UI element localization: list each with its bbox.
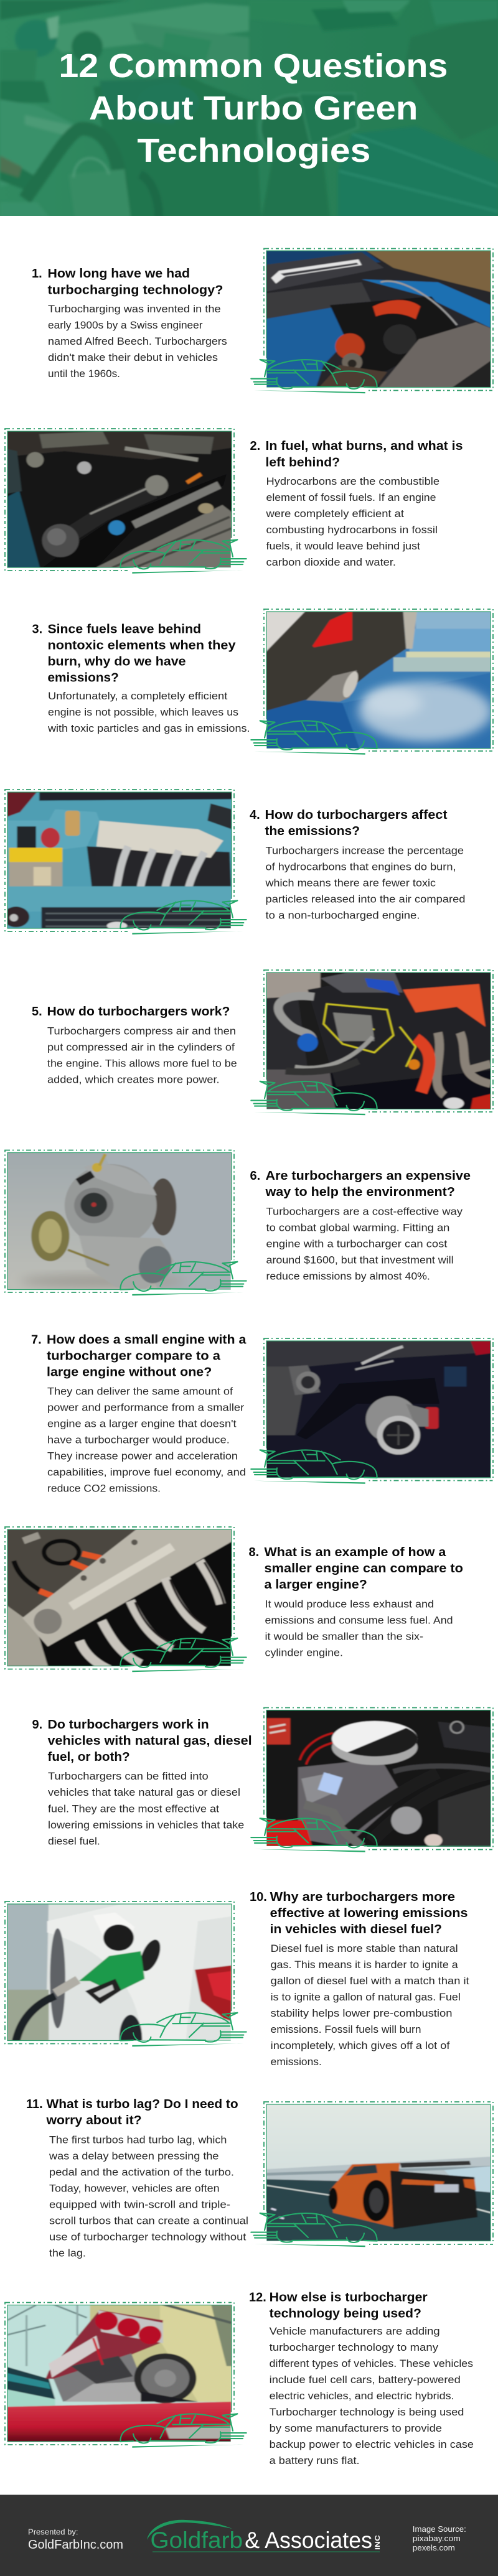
answer text 11 bbox=[49, 2134, 248, 2259]
title bbox=[59, 47, 448, 169]
heading 12: 12. bbox=[249, 2290, 266, 2304]
photo 4: teal engine bay with chrome manifold bbox=[1, 786, 247, 937]
answer text 2: fuels, it would leave behind just bbox=[266, 540, 420, 552]
heading 7: 7. bbox=[31, 1333, 42, 1346]
answer text 10 bbox=[271, 1943, 469, 2068]
title: About Turbo Green bbox=[89, 90, 418, 127]
answer text 7: They increase power and acceleration bbox=[47, 1450, 238, 1462]
title: Technologies bbox=[137, 132, 370, 169]
panel: question 11 bbox=[26, 2098, 497, 2259]
panel: question 6 bbox=[1, 1147, 471, 1299]
heading 2: 2. bbox=[250, 439, 260, 453]
icon: car sketch bbox=[120, 538, 247, 576]
heading 3: burn, why do we have bbox=[47, 655, 186, 668]
answer text 1: didn't make their debut in vehicles bbox=[48, 352, 218, 363]
heading 5: 5. bbox=[32, 1005, 42, 1019]
answer text 9: Turbochargers can be fitted into bbox=[48, 1770, 209, 1782]
answer text 9: diesel fuel. bbox=[48, 1835, 100, 1847]
answer text 5 bbox=[47, 1025, 237, 1086]
answer text 6: reduce emissions by almost 40%. bbox=[266, 1270, 430, 1282]
photo 10: green fuel nozzle in white car bbox=[4, 1901, 247, 2047]
icon: car sketch bbox=[251, 1449, 377, 1486]
answer text 2: Hydrocarbons are the combustible bbox=[266, 475, 439, 487]
heading 7: large engine without one? bbox=[47, 1365, 212, 1379]
answer text 5: put compressed air in the cylinders of bbox=[47, 1042, 235, 1053]
icon: car sketch bbox=[251, 358, 377, 396]
heading 1: 1. bbox=[32, 267, 42, 281]
answer text 6: around $1600, but that investment will bbox=[266, 1254, 454, 1266]
heading 6: 6. bbox=[250, 1169, 260, 1183]
presented by bbox=[28, 2527, 123, 2552]
photo 5: cutaway engine on display bbox=[251, 967, 497, 1118]
answer text 3: Unfortunately, a completely efficient bbox=[48, 690, 228, 702]
heading 6: Are turbochargers an expensive bbox=[265, 1169, 471, 1183]
answer text 6: Turbochargers are a cost-effective way bbox=[266, 1205, 463, 1217]
photo 9: V8 engine with round air cleaner bbox=[251, 1704, 497, 1855]
heading 9: Do turbochargers work in bbox=[47, 1718, 209, 1732]
answer text 11: equipped with twin-scroll and triple- bbox=[49, 2199, 230, 2211]
answer text 2: were completely efficient at bbox=[265, 508, 404, 520]
answer text 8: emissions and consume less fuel. And bbox=[265, 1614, 453, 1626]
heading 3: nontoxic elements when they bbox=[47, 638, 236, 652]
presented by: Presented by: bbox=[28, 2527, 78, 2536]
icon: car sketch bbox=[120, 2011, 247, 2050]
heading 4: How do turbochargers affect bbox=[265, 808, 448, 822]
answer text 1: named Alfred Beech. Turbochargers bbox=[48, 335, 227, 347]
heading 12: technology being used? bbox=[270, 2307, 421, 2320]
answer text 5: added, which creates more power. bbox=[47, 1074, 220, 1086]
answer text 10: gallon of diesel fuel with a match than it bbox=[271, 1975, 469, 1987]
answer text 7: They can deliver the same amount of bbox=[47, 1386, 233, 1398]
heading 9: 9. bbox=[32, 1718, 42, 1732]
answer text 2: combusting hydrocarbons in fossil bbox=[266, 524, 438, 536]
icon: car sketch bbox=[251, 2211, 377, 2250]
heading 3 bbox=[32, 622, 236, 684]
answer text 12: by some manufacturers to provide bbox=[270, 2422, 442, 2434]
answer text 12: different types of vehicles. These vehicles bbox=[270, 2358, 473, 2369]
presented by: GoldFarbInc.com bbox=[28, 2538, 123, 2552]
logo: Goldfarb and Associates: Goldfarb bbox=[151, 2527, 243, 2553]
answer text 10: stability helps lower pre-combustion bbox=[271, 2007, 452, 2019]
heading 7: turbocharger compare to a bbox=[47, 1349, 221, 1363]
heading 12: How else is turbocharger bbox=[270, 2290, 428, 2304]
answer text 11: The first turbos had turbo lag, which bbox=[49, 2134, 227, 2146]
answer text 11: scroll turbos that can create a continual bbox=[49, 2215, 248, 2227]
heading 2: In fuel, what burns, and what is bbox=[265, 439, 463, 453]
answer text 2: carbon dioxide and water. bbox=[266, 556, 396, 568]
photo 6: standalone turbocharger bbox=[1, 1147, 247, 1299]
hero background: tinted engine photo bbox=[0, 0, 498, 218]
answer text 5: the engine. This allows more fuel to be bbox=[47, 1058, 237, 1070]
answer text 10: Diesel fuel is more stable than natural bbox=[271, 1943, 458, 1954]
icon: car sketch bbox=[120, 2412, 247, 2450]
answer text 4: which means there are fewer toxic bbox=[265, 877, 436, 889]
answer text 9: vehicles that take natural gas or diesel bbox=[48, 1786, 240, 1798]
heading 4 bbox=[250, 808, 448, 838]
panel: question 4 bbox=[1, 786, 466, 937]
heading 1: turbocharging technology? bbox=[47, 284, 223, 297]
answer text 12: electric vehicles, and electric hybrids. bbox=[270, 2390, 454, 2402]
heading 10: 10. bbox=[250, 1890, 267, 1904]
answer text 1: early 1900s by a Swiss engineer bbox=[48, 319, 203, 331]
panel: question 12 bbox=[1, 2290, 474, 2466]
answer text 4 bbox=[265, 844, 466, 922]
logo: Goldfarb and Associates: INC bbox=[374, 2535, 382, 2550]
answer text 8 bbox=[265, 1598, 453, 1658]
panel: question 3 bbox=[32, 606, 497, 757]
answer text 12: Turbocharger technology is being used bbox=[270, 2406, 464, 2418]
answer text 12: include fuel cell cars, battery-powered bbox=[270, 2374, 461, 2386]
answer text 11: Today, however, vehicles are often bbox=[49, 2183, 220, 2195]
answer text 4: particles released into the air compared bbox=[265, 893, 466, 905]
answer text 8: cylinder engine. bbox=[265, 1646, 343, 1658]
answer text 1: until the 1960s. bbox=[48, 368, 120, 380]
answer text 12: turbocharger technology to many bbox=[270, 2341, 439, 2353]
heading 5: How do turbochargers work? bbox=[47, 1005, 230, 1019]
answer text 10: is to ignite a gallon of natural gas. Fuel bbox=[271, 1991, 461, 2003]
answer text 4: Turbochargers increase the percentage bbox=[265, 844, 464, 856]
photo 2: dark engine with filter and pipe bbox=[1, 426, 247, 576]
answer text 8: It would produce less exhaust and bbox=[265, 1598, 434, 1610]
answer text 11: use of turbocharger technology without bbox=[49, 2231, 247, 2243]
heading 6: way to help the environment? bbox=[265, 1185, 455, 1199]
answer text 5: Turbochargers compress air and then bbox=[47, 1025, 236, 1037]
answer text 4: to a non-turbocharged engine. bbox=[265, 910, 420, 922]
answer text 11: the lag. bbox=[49, 2247, 86, 2259]
panel: question 10 bbox=[1, 1890, 469, 2068]
answer text 12: Vehicle manufacturers are adding bbox=[270, 2325, 440, 2337]
answer text 7: engine as a larger engine that doesn't bbox=[47, 1418, 237, 1430]
heading 3: emissions? bbox=[47, 671, 119, 684]
answer text 8: it would be smaller than the six- bbox=[265, 1630, 423, 1642]
answer text 9 bbox=[48, 1770, 244, 1847]
answer text 11: pedal and the activation of the turbo. bbox=[49, 2167, 234, 2178]
image source credits: Image Source: bbox=[413, 2524, 466, 2534]
heading 6 bbox=[250, 1169, 471, 1199]
answer text 4: of hydrocarbons that engines do burn, bbox=[265, 861, 456, 872]
photo 7: turbo in dark engine bay bbox=[251, 1335, 497, 1486]
heading 4: 4. bbox=[250, 808, 260, 822]
panel: question 7 bbox=[31, 1333, 497, 1495]
photo 11: orange sports car on bridge bbox=[251, 2099, 497, 2250]
heading 8: a larger engine? bbox=[264, 1578, 367, 1592]
icon: car sketch bbox=[251, 719, 377, 757]
answer text 7 bbox=[47, 1386, 246, 1495]
heading 7 bbox=[31, 1333, 247, 1379]
answer text 10: incompletely, which gives off a lot of bbox=[271, 2040, 450, 2051]
answer text 12: backup power to electric vehicles in case bbox=[270, 2438, 474, 2450]
title: 12 Common Questions bbox=[59, 47, 448, 85]
answer text 2 bbox=[265, 475, 439, 568]
icon: car sketch bbox=[120, 1260, 247, 1299]
panel: question 8 bbox=[1, 1524, 463, 1675]
answer text 6: engine with a turbocharger can cost bbox=[266, 1238, 448, 1249]
heading 8: What is an example of how a bbox=[264, 1546, 446, 1559]
answer text 3 bbox=[47, 690, 250, 734]
answer text 3: with toxic particles and gas in emissions. bbox=[47, 722, 250, 734]
panel: question 2 bbox=[1, 426, 463, 576]
heading 10: Why are turbochargers more bbox=[270, 1890, 455, 1904]
image source credits bbox=[413, 2524, 466, 2552]
heading 9: fuel, or both? bbox=[47, 1750, 130, 1764]
answer text 2: element of fossil fuels. If an engine bbox=[266, 492, 436, 503]
heading 3: 3. bbox=[32, 622, 42, 636]
heading 9: vehicles with natural gas, diesel bbox=[47, 1734, 252, 1748]
image source credits: pixabay.com bbox=[413, 2534, 461, 2543]
answer text 9: lowering emissions in vehicles that take bbox=[48, 1819, 244, 1831]
answer text 12 bbox=[270, 2325, 474, 2466]
heading 12 bbox=[249, 2290, 428, 2320]
heading 11: 11. bbox=[26, 2098, 43, 2111]
footer bbox=[0, 2495, 498, 2576]
heading 9 bbox=[32, 1718, 252, 1764]
answer text 10: emissions. bbox=[271, 2056, 322, 2068]
photo 12: red hot rod supercharger bbox=[1, 2300, 247, 2450]
logo: Goldfarb and Associates: & Associates bbox=[245, 2527, 372, 2553]
heading 8: smaller engine can compare to bbox=[264, 1562, 463, 1575]
heading 2 bbox=[250, 439, 463, 469]
heading 10: effective at lowering emissions bbox=[270, 1906, 468, 1920]
answer text 1 bbox=[48, 303, 227, 380]
panel: question 5 bbox=[32, 967, 497, 1118]
answer text 1: Turbocharging was invented in the bbox=[48, 303, 221, 315]
photo 1: blue car engine bay bbox=[251, 245, 497, 396]
icon: car sketch bbox=[251, 1817, 377, 1855]
heading 2: left behind? bbox=[265, 455, 340, 469]
panel: question 9 bbox=[32, 1704, 497, 1855]
heading 1 bbox=[32, 267, 223, 297]
answer text 3: engine is not possible, which leaves us bbox=[48, 706, 238, 718]
panel: question 1 bbox=[32, 245, 497, 396]
answer text 10: gas. This means it is harder to ignite a bbox=[271, 1959, 458, 1971]
logo: Goldfarb and Associates bbox=[147, 2520, 382, 2553]
heading 10 bbox=[250, 1890, 468, 1936]
answer text 7: capabilities, improve fuel economy, and bbox=[47, 1467, 246, 1478]
icon: car sketch bbox=[120, 1636, 247, 1675]
heading 8: 8. bbox=[249, 1546, 259, 1559]
heading 11 bbox=[26, 2098, 238, 2127]
photo 8: chrome exhaust manifold bbox=[1, 1524, 247, 1675]
answer text 11: was a delay between pressing the bbox=[49, 2150, 219, 2162]
answer text 6: to combat global warming. Fitting an bbox=[266, 1221, 449, 1233]
icon: car sketch bbox=[251, 1080, 377, 1118]
heading 4: the emissions? bbox=[265, 824, 360, 838]
heading 1: How long have we had bbox=[47, 267, 190, 281]
answer text 9: fuel. They are the most effective at bbox=[48, 1803, 219, 1814]
icon: car sketch bbox=[120, 899, 247, 937]
answer text 7: reduce CO2 emissions. bbox=[47, 1483, 161, 1495]
heading 11: worry about it? bbox=[45, 2114, 142, 2127]
answer text 6 bbox=[266, 1205, 463, 1282]
header banner bbox=[0, 0, 498, 218]
photo 3: exhaust pipe with smoke bbox=[251, 606, 497, 757]
image source credits: pexels.com bbox=[413, 2543, 455, 2552]
answer text 10: emissions. Fossil fuels will burn bbox=[271, 2023, 421, 2035]
heading 10: in vehicles with diesel fuel? bbox=[270, 1923, 442, 1936]
heading 3: Since fuels leave behind bbox=[47, 622, 201, 636]
heading 11: What is turbo lag? Do I need to bbox=[46, 2098, 238, 2111]
heading 7: How does a small engine with a bbox=[47, 1333, 247, 1346]
heading 8 bbox=[249, 1546, 463, 1592]
answer text 12: a battery runs flat. bbox=[270, 2455, 360, 2466]
answer text 7: have a turbocharger would produce. bbox=[47, 1434, 230, 1446]
answer text 7: power and performance from a smaller bbox=[47, 1402, 245, 1414]
